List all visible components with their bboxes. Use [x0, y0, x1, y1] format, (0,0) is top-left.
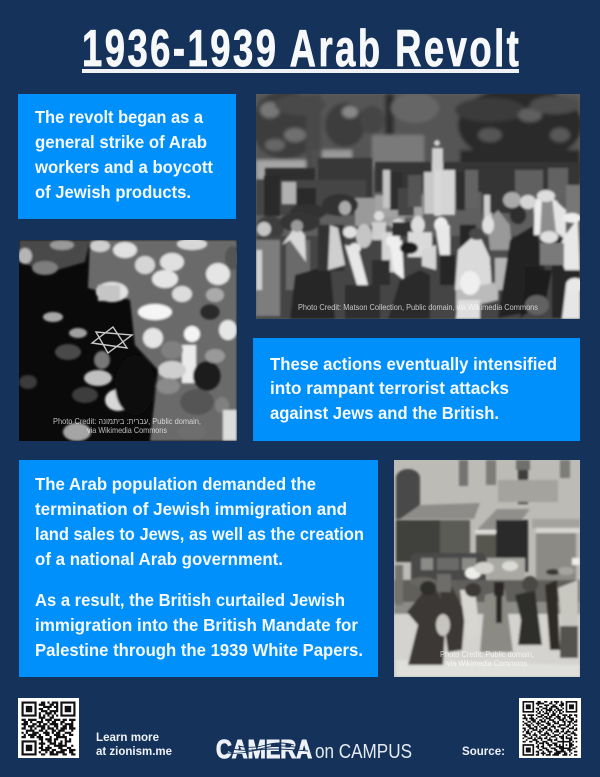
panel: strike text: general strike of Arab	[35, 132, 207, 152]
foreground crowd	[256, 236, 580, 319]
photo: crowd with Star of David	[18, 238, 239, 441]
standing men mid	[383, 170, 390, 208]
QR code: zionism.me	[18, 698, 79, 758]
panel: demands and White Papers text: As a result, the British curtailed Jewish	[35, 590, 345, 610]
photo credit: Hebrew source: Photo Credit: עברית: ביתמונה, Public domain,	[53, 417, 201, 426]
people	[407, 590, 446, 665]
photo credit: street scene: via Wikimedia Commons	[447, 659, 527, 668]
logo: CAMERA on CAMPUS: CAMERA	[216, 736, 312, 764]
photo: street scene with British soldier	[394, 460, 580, 677]
text: learn more	[96, 730, 172, 758]
text: learn more: at zionism.me	[96, 744, 172, 758]
panel: demands and White Papers text	[19, 460, 378, 677]
photo credit: street scene: Photo Credit: Public domain,	[440, 650, 534, 659]
panel: strike text	[18, 94, 236, 219]
logo: CAMERA on CAMPUS: on CAMPUS	[315, 740, 412, 763]
panel: intensified text: These actions eventually intensified	[270, 354, 557, 374]
panel: intensified text: into rampant terrorist attacks	[270, 378, 509, 398]
panel: intensified text	[253, 338, 580, 441]
text: source: Source:	[462, 744, 505, 758]
panel: demands and White Papers text: The Arab population demanded the	[35, 474, 316, 494]
panel: demands and White Papers text: land sales to Jews, as well as the creation	[35, 524, 364, 544]
panel: strike text: workers and a boycott	[34, 157, 213, 177]
ground	[394, 612, 580, 677]
panel: strike text: The revolt began as a	[35, 107, 203, 127]
QR code: source	[519, 698, 581, 758]
left side seated and standing	[264, 176, 280, 216]
panel: demands and White Papers text: of a national Arab government.	[35, 549, 283, 569]
panel: demands and White Papers text: Palestine through the 1939 White Papers.	[35, 640, 363, 660]
panel: strike text: of Jewish products.	[35, 182, 191, 202]
logo: CAMERA on CAMPUS	[216, 736, 412, 764]
mid crowd	[265, 168, 315, 183]
panel: intensified text: against Jews and the British.	[270, 403, 499, 423]
panel: demands and White Papers text: termination of Jewish immigration and	[35, 499, 347, 519]
photo credit: Hebrew source: via Wikimedia Commons	[87, 426, 167, 435]
icon: Star of David	[92, 327, 132, 353]
photo credit: street scene	[440, 650, 534, 668]
photo credit: Hebrew source	[53, 417, 201, 435]
photo credit: Matson: Photo Credit: Matson Collection, Public domain, via Wikimedia Commons	[298, 303, 538, 312]
text: learn more: Learn more	[96, 730, 159, 744]
photo: Arab crowd gathering under trees	[251, 87, 584, 319]
panel: demands and White Papers text: immigration into the British Mandate for	[35, 615, 358, 635]
title: 1936-1939 Arab Revolt	[82, 18, 519, 78]
speaker	[432, 148, 443, 178]
